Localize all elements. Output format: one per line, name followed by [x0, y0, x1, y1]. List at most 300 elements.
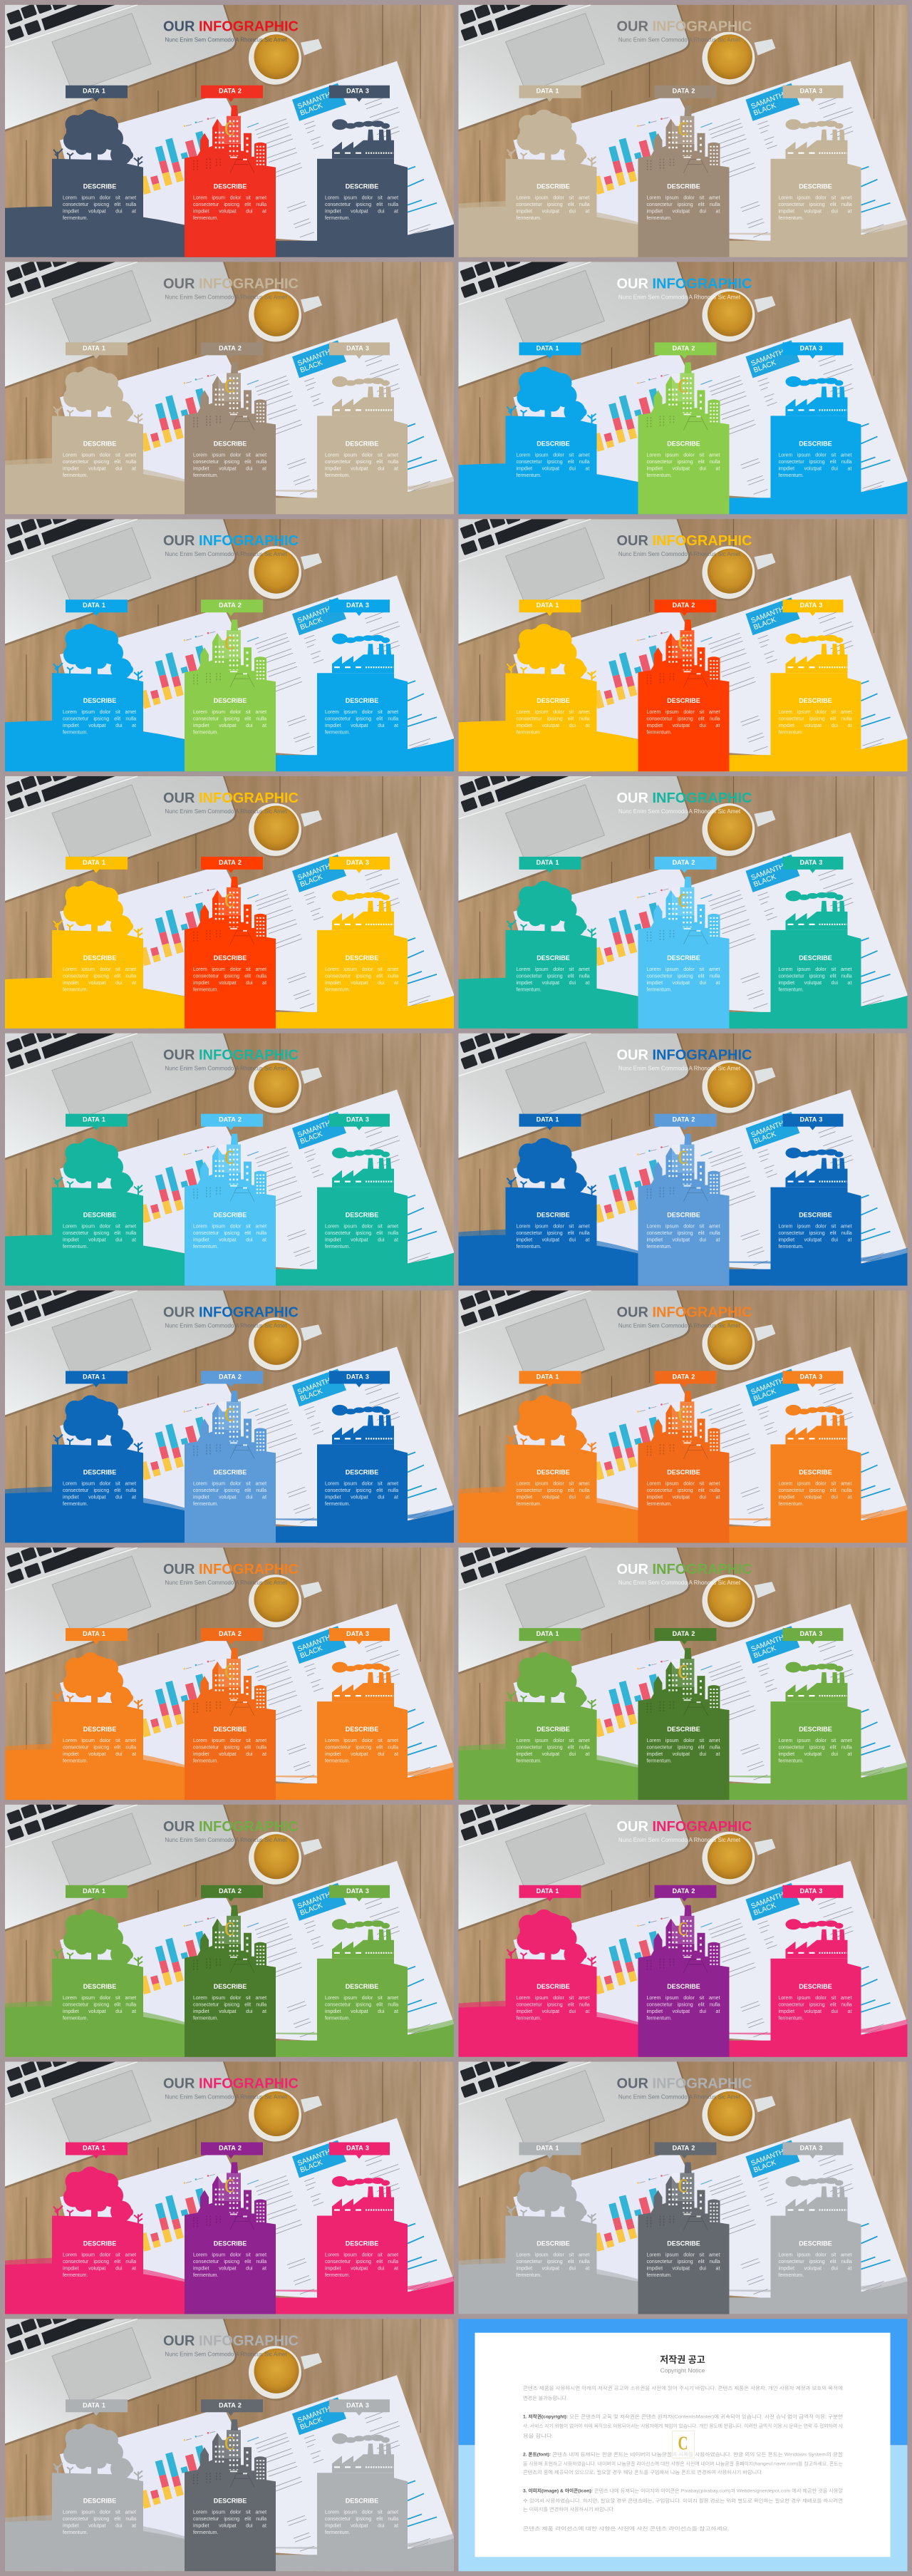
resume name tag: SAMANTHA [296, 1375, 336, 1396]
panel: data 3 factory: DATA 3 [800, 1887, 822, 1895]
panel: data 2 city: Lorem ipsum dolor sit amet [647, 2252, 720, 2258]
watermark: C [678, 890, 688, 911]
panel: data 1 tree: consectetur ipsicng elit nulla [516, 2002, 590, 2007]
watermark [673, 117, 694, 144]
panel: data 1 tree: consectetur ipsicng elit nulla [63, 1746, 136, 1751]
panel: data 1 tree: consectetur ipsicng elit nulla [63, 202, 136, 207]
light blue background bottom [459, 2445, 908, 2571]
panel: data 2 city: DATA 2 [673, 1887, 695, 1895]
resume name tag: BLACK [299, 2158, 324, 2175]
photo background [459, 2052, 908, 2314]
title: OUR INFOGRAPHIC [617, 533, 752, 549]
panel: data 1 tree: DATA 1 [537, 88, 559, 95]
slide 15: green [5, 1795, 454, 2057]
title: OUR INFOGRAPHIC [617, 1304, 752, 1320]
photo background [459, 252, 908, 514]
panel: data 3 factory [771, 86, 861, 257]
panel: data 2 city [638, 1114, 730, 1286]
photo background [5, 510, 454, 771]
slide 3: tan [5, 252, 454, 514]
notice body text: 콘텐츠 내에 등재되는 이미지와 아이콘은 Pixabay(pixabay.com)과 Webdesignerdepot.com 에서 제공한 것을 사용할 [594, 2487, 843, 2493]
slide 1: navy and red [5, 0, 454, 257]
wave band [5, 2515, 454, 2571]
title: OUR INFOGRAPHIC [163, 1819, 299, 1835]
panel: data 3 factory: fermentum. [325, 731, 350, 736]
photo background [5, 252, 454, 514]
panel: data 2 city: Lorem ipsum dolor sit amet [647, 967, 720, 972]
title: OUR INFOGRAPHIC [163, 1304, 299, 1320]
panel: data 3 factory: fermentum. [325, 1502, 350, 1507]
panel: data 2 city [638, 86, 730, 257]
panel: data 2 city: DATA 2 [219, 1116, 242, 1123]
panel: data 1 tree: impdiet volutpat dui at [63, 1752, 136, 1757]
panel: data 3 factory: fermentum. [778, 2273, 804, 2278]
photo background [459, 510, 908, 771]
panel: data 3 factory: DATA 3 [800, 1116, 822, 1123]
notice body text: 콘텐츠 내에 등재되는 한글 폰트는 네이버의 나눔글꼴과 서체를 사용하였습니다. 한글 외의 모든 폰트는 Windows System의 글꼴 [552, 2451, 843, 2457]
watermark [673, 2174, 694, 2201]
panel: data 3 factory: Lorem ipsum dolor sit amet [325, 1481, 398, 1486]
wave band [459, 458, 908, 514]
watermark: C [224, 1661, 234, 1682]
panel: data 1 tree: consectetur ipsicng elit nulla [63, 2517, 136, 2522]
panel: data 3 factory: DESCRIBE [799, 183, 832, 190]
panel: data 3 factory: fermentum. [778, 987, 804, 992]
panel: data 1 tree: consectetur ipsicng elit nulla [516, 974, 590, 979]
panel: data 1 tree: Lorem ipsum dolor sit amet [63, 1225, 136, 1230]
panel: data 2 city: DESCRIBE [214, 1983, 247, 1990]
panel: data 2 city: Lorem ipsum dolor sit amet [193, 1996, 266, 2001]
panel: data 3 factory: fermentum. [325, 2273, 350, 2278]
panel: data 1 tree: DESCRIBE [83, 2240, 116, 2247]
watermark [219, 117, 241, 144]
notice body text: 콘텐츠의 품에 제공되어 있으므로, 필요할 경우 해당 폰트를 구입해서 나눔 폰트로 변경하여 사용하시기 바랍니다. [523, 2468, 763, 2475]
wave band [5, 2001, 454, 2057]
panel: data 2 city: DATA 2 [219, 602, 242, 609]
panel: data 1 tree: DATA 1 [537, 344, 559, 351]
panel: data 1 tree [506, 342, 597, 514]
panel: data 3 factory: DESCRIBE [799, 2240, 832, 2247]
panel: data 2 city: DATA 2 [219, 1887, 242, 1895]
panel: data 2 city: impdiet volutpat dui at [647, 1495, 720, 1500]
panel: data 2 city: DATA 2 [673, 602, 695, 609]
subtitle: Nunc Enim Sem Commodo A Rhoncus Sic Amet [165, 294, 287, 300]
panel: data 3 factory: DESCRIBE [346, 1726, 378, 1733]
panel: data 2 city: Lorem ipsum dolor sit amet [193, 1481, 266, 1486]
panel: data 2 city [185, 86, 276, 257]
slide 12: orange [459, 1281, 908, 1542]
watermark [673, 2431, 694, 2458]
wave band [5, 458, 454, 514]
panel: data 3 factory: Lorem ipsum dolor sit amet [778, 1738, 852, 1743]
panel: data 2 city: Lorem ipsum dolor sit amet [193, 710, 266, 715]
notice body text: 콘텐츠 제품 라이선스에 대한 사항은 사전에 사전 콘텐츠 라이선스를 참고하세요. [523, 2525, 730, 2531]
resume name tag: BLACK [299, 616, 324, 632]
panel: data 1 tree: fermentum. [63, 1245, 88, 1250]
title: OUR INFOGRAPHIC [617, 790, 752, 806]
resume name tag: SAMANTHA [750, 346, 789, 368]
panel: data 3 factory: consectetur ipsicng elit nulla [325, 1746, 398, 1751]
panel: data 1 tree: consectetur ipsicng elit nulla [63, 2002, 136, 2007]
resume name tag: BLACK [299, 102, 324, 118]
panel: data 1 tree: Lorem ipsum dolor sit amet [516, 710, 590, 715]
panel: data 2 city: fermentum. [193, 987, 218, 992]
panel: data 1 tree: impdiet volutpat dui at [63, 2523, 136, 2528]
panel: data 2 city: fermentum. [193, 2273, 218, 2278]
resume name tag: BLACK [299, 2416, 324, 2431]
panel: data 2 city: DATA 2 [219, 344, 242, 351]
panel: data 2 city: Lorem ipsum dolor sit amet [647, 1738, 720, 1743]
panel: data 3 factory: Lorem ipsum dolor sit amet [325, 1996, 398, 2001]
panel: data 2 city: Lorem ipsum dolor sit amet [193, 1225, 266, 1230]
panel: data 3 factory: consectetur ipsicng elit nulla [325, 2002, 398, 2007]
panel: data 3 factory: DATA 3 [346, 2401, 369, 2408]
title: OUR INFOGRAPHIC [163, 2333, 299, 2349]
panel: data 2 city: Lorem ipsum dolor sit amet [193, 453, 266, 458]
photo background [5, 2052, 454, 2314]
panel: data 3 factory: Lorem ipsum dolor sit amet [325, 967, 398, 972]
panel: data 2 city: DATA 2 [673, 859, 695, 866]
resume name tag: SAMANTHA [750, 861, 789, 882]
resume name tag: SAMANTHA [296, 346, 336, 368]
photo background [5, 766, 454, 1029]
panel: data 3 factory: fermentum. [778, 1502, 804, 1507]
panel: data 2 city: DATA 2 [673, 1373, 695, 1380]
panel: data 3 factory [771, 1114, 861, 1286]
panel: data 2 city [185, 2143, 276, 2314]
panel: data 1 tree: DATA 1 [83, 1887, 105, 1895]
panel: data 2 city: Lorem ipsum dolor sit amet [647, 1225, 720, 1230]
panel: data 2 city: Lorem ipsum dolor sit amet [193, 196, 266, 201]
watermark [673, 1917, 694, 1944]
panel: data 2 city: DATA 2 [219, 2144, 242, 2151]
wave band [459, 1743, 908, 1800]
subtitle: Nunc Enim Sem Commodo A Rhoncus Sic Amet [165, 2351, 287, 2357]
resume name tag: SAMANTHA [750, 1118, 789, 1139]
panel: data 3 factory: consectetur ipsicng elit nulla [778, 974, 852, 979]
panel: data 3 factory [317, 342, 408, 514]
panel: data 2 city: DESCRIBE [667, 1468, 700, 1475]
panel: data 1 tree: Lorem ipsum dolor sit amet [516, 1481, 590, 1486]
resume name tag: SAMANTHA [296, 89, 336, 111]
subtitle: Nunc Enim Sem Commodo A Rhoncus Sic Amet [165, 808, 287, 815]
watermark: C [678, 1403, 688, 1425]
photo background [459, 0, 908, 257]
notice heading: 저작권 공고 [660, 2354, 705, 2365]
slide 6: yellow and red-orange [459, 510, 908, 771]
panel: data 2 city: impdiet volutpat dui at [193, 1752, 266, 1757]
title: OUR INFOGRAPHIC [163, 19, 299, 35]
panel: data 3 factory: impdiet volutpat dui at [325, 981, 398, 986]
white notice card [475, 2333, 891, 2557]
panel: data 1 tree: Lorem ipsum dolor sit amet [63, 1996, 136, 2001]
panel: data 3 factory [317, 857, 408, 1029]
panel: data 2 city: consectetur ipsicng elit nulla [647, 1488, 720, 1493]
panel: data 3 factory: Lorem ipsum dolor sit amet [778, 453, 852, 458]
panel: data 2 city: DESCRIBE [214, 183, 247, 190]
panel: data 2 city: consectetur ipsicng elit nulla [193, 1746, 266, 1751]
panel: data 3 factory: consectetur ipsicng elit nulla [325, 974, 398, 979]
panel: data 1 tree: impdiet volutpat dui at [63, 2267, 136, 2271]
panel: data 3 factory: impdiet volutpat dui at [325, 1238, 398, 1243]
panel: data 1 tree: consectetur ipsicng elit nulla [63, 974, 136, 979]
panel: data 3 factory: impdiet volutpat dui at [778, 210, 851, 215]
panel: data 3 factory: Lorem ipsum dolor sit amet [325, 453, 398, 458]
panel: data 1 tree: impdiet volutpat dui at [63, 1238, 136, 1243]
resume name tag: SAMANTHA [296, 604, 336, 625]
panel: data 1 tree [506, 857, 597, 1029]
panel: data 1 tree: DESCRIBE [83, 183, 116, 190]
panel: data 1 tree: DATA 1 [83, 344, 105, 351]
watermark [673, 1659, 694, 1686]
panel: data 2 city: Lorem ipsum dolor sit amet [193, 2252, 266, 2258]
panel: data 2 city [185, 1371, 276, 1542]
slide 4: sky blue and green [459, 252, 908, 514]
panel: data 1 tree: DESCRIBE [537, 440, 570, 447]
panel: data 1 tree: Lorem ipsum dolor sit amet [516, 453, 590, 458]
wave band [5, 1486, 454, 1542]
panel: data 2 city: DESCRIBE [667, 1212, 700, 1219]
panel: data 2 city [185, 2399, 276, 2571]
wave band [459, 715, 908, 771]
panel: data 1 tree: consectetur ipsicng elit nulla [63, 460, 136, 465]
slide 17: pink and purple [5, 2052, 454, 2314]
subtitle: Nunc Enim Sem Commodo A Rhoncus Sic Amet [165, 1580, 287, 1586]
resume name tag: BLACK [752, 102, 777, 118]
resume name tag: BLACK [752, 359, 777, 375]
panel: data 1 tree: fermentum. [516, 1502, 542, 1507]
subtitle: Nunc Enim Sem Commodo A Rhoncus Sic Amet [618, 1066, 741, 1072]
blue background top [459, 2319, 908, 2445]
photo background [459, 1538, 908, 1800]
panel: data 2 city: consectetur ipsicng elit nulla [193, 2260, 266, 2265]
panel: data 2 city: DESCRIBE [214, 1468, 247, 1475]
panel: data 3 factory: DATA 3 [346, 344, 369, 351]
resume name tag: BLACK [299, 1387, 324, 1403]
slide 2: tan [459, 0, 908, 257]
panel: data 1 tree [52, 1885, 143, 2057]
panel: data 3 factory: Lorem ipsum dolor sit amet [778, 196, 852, 201]
panel: data 3 factory: DESCRIBE [799, 1212, 832, 1219]
panel: data 1 tree: impdiet volutpat dui at [516, 2009, 589, 2014]
panel: data 3 factory: DATA 3 [800, 859, 822, 866]
resume name tag: SAMANTHA [750, 1375, 789, 1396]
panel: data 1 tree: impdiet volutpat dui at [516, 981, 589, 986]
panel: data 2 city [638, 2143, 730, 2314]
panel: data 2 city: consectetur ipsicng elit nulla [193, 1488, 266, 1493]
panel: data 3 factory: consectetur ipsicng elit nulla [325, 460, 398, 465]
panel: data 1 tree: DESCRIBE [537, 697, 570, 704]
panel: data 3 factory: Lorem ipsum dolor sit amet [778, 2252, 852, 2258]
panel: data 1 tree: DATA 1 [83, 859, 105, 866]
panel: data 2 city: Lorem ipsum dolor sit amet [647, 1481, 720, 1486]
wave band [459, 2258, 908, 2314]
slide 18: gray [459, 2052, 908, 2314]
resume name tag: BLACK [752, 1644, 777, 1660]
panel: data 1 tree: DESCRIBE [83, 1212, 116, 1219]
slide 7: yellow and red-orange [5, 766, 454, 1029]
notice body text: 사, 서비스 사기 위험이 없어야 하며 목적으로 이용되어서는 사용자에게 책임이 있습니다. 개인 용도에 한합니다. 이러한 금액적 이용 시 문의는 연락 후 협의하여 사 [523, 2422, 843, 2428]
panel: data 1 tree: DESCRIBE [537, 954, 570, 962]
panel: data 3 factory: DESCRIBE [799, 440, 832, 447]
panel: data 3 factory: impdiet volutpat dui at [325, 1495, 398, 1500]
panel: data 1 tree: fermentum. [63, 2530, 88, 2535]
wave band [459, 972, 908, 1029]
panel: data 1 tree [52, 857, 143, 1029]
panel: data 2 city: DESCRIBE [214, 1726, 247, 1733]
resume name tag: BLACK [752, 873, 777, 889]
resume name tag: SAMANTHA [750, 604, 789, 625]
watermark: C [224, 632, 234, 654]
notice body text: 모든 콘텐츠의 교육 및 저작권은 콘텐츠 원저자(ContentsMaster)에 귀속되어 있습니다. 사전 승낙 없이 금액적 이용, 구분한 [569, 2413, 843, 2419]
panel: data 1 tree [506, 1371, 597, 1542]
panel: data 1 tree: DATA 1 [83, 2144, 105, 2151]
panel: data 3 factory: DESCRIBE [346, 1468, 378, 1475]
panel: data 3 factory: DATA 3 [800, 2144, 822, 2151]
panel: data 3 factory: DATA 3 [346, 1373, 369, 1380]
panel: data 3 factory: Lorem ipsum dolor sit amet [325, 2510, 398, 2515]
notice body text: 을 사용해 표현하고 사용하였습니다. 네이버의 나눔글꼴 라이선스에 대한 사항은 사전에 네이버 나눔글꼴 홈페이지(hangeul.naver.com)를 참고하세요. 폰트는 [523, 2460, 843, 2466]
panel: data 1 tree [506, 1114, 597, 1286]
panel: data 2 city: DATA 2 [673, 88, 695, 95]
panel: data 2 city: DATA 2 [673, 2144, 695, 2151]
photo background [5, 2309, 454, 2571]
panel: data 3 factory: consectetur ipsicng elit nulla [778, 460, 852, 465]
panel: data 1 tree: impdiet volutpat dui at [63, 723, 136, 728]
subtitle: Nunc Enim Sem Commodo A Rhoncus Sic Amet [618, 551, 741, 557]
panel: data 1 tree [52, 2143, 143, 2314]
title: OUR INFOGRAPHIC [163, 533, 299, 549]
panel: data 3 factory [771, 1371, 861, 1542]
notice body text: 는 이미지를 변경하여 사용하시기 바랍니다. [523, 2505, 615, 2512]
panel: data 3 factory: impdiet volutpat dui at [325, 466, 398, 471]
panel: data 1 tree: Lorem ipsum dolor sit amet [63, 1738, 136, 1743]
panel: data 3 factory [771, 342, 861, 514]
panel: data 2 city [638, 599, 730, 771]
watermark: C [224, 890, 234, 911]
panel: data 3 factory: impdiet volutpat dui at [778, 2267, 851, 2271]
panel: data 1 tree: Lorem ipsum dolor sit amet [63, 196, 136, 201]
panel: data 1 tree: consectetur ipsicng elit nulla [63, 717, 136, 722]
panel: data 1 tree [506, 599, 597, 771]
panel: data 3 factory: consectetur ipsicng elit nulla [778, 2260, 852, 2265]
panel: data 1 tree: consectetur ipsicng elit nulla [63, 2260, 136, 2265]
panel: data 1 tree: DATA 1 [537, 1373, 559, 1380]
panel: data 1 tree: fermentum. [516, 473, 542, 478]
panel: data 3 factory: Lorem ipsum dolor sit amet [325, 196, 398, 201]
title: OUR INFOGRAPHIC [617, 1819, 752, 1835]
subtitle: Nunc Enim Sem Commodo A Rhoncus Sic Amet [165, 1322, 287, 1329]
panel: data 3 factory: DESCRIBE [799, 1468, 832, 1475]
panel: data 2 city: fermentum. [647, 1502, 672, 1507]
subtitle: Nunc Enim Sem Commodo A Rhoncus Sic Amet [165, 1837, 287, 1843]
resume name tag: SAMANTHA [296, 2404, 336, 2425]
panel: data 3 factory: DESCRIBE [799, 697, 832, 704]
panel: data 2 city: consectetur ipsicng elit nulla [647, 2002, 720, 2007]
photo background [5, 1281, 454, 1542]
resume name tag: SAMANTHA [296, 2146, 336, 2168]
panel: data 2 city [638, 1371, 730, 1542]
panel: data 3 factory: fermentum. [325, 2016, 350, 2021]
panel: data 1 tree [52, 86, 143, 257]
watermark: C [678, 1147, 688, 1168]
panel: data 1 tree [506, 1885, 597, 2057]
panel: data 1 tree: Lorem ipsum dolor sit amet [63, 710, 136, 715]
panel: data 1 tree: consectetur ipsicng elit nulla [516, 1746, 590, 1751]
watermark [673, 631, 694, 658]
resume name tag: SAMANTHA [750, 1632, 789, 1654]
panel: data 3 factory: DESCRIBE [346, 2497, 378, 2504]
panel: data 1 tree: fermentum. [516, 2016, 542, 2021]
panel: data 3 factory: DATA 3 [346, 1116, 369, 1123]
wave band [5, 1230, 454, 1286]
notice body text: 수 있어서 사용하였습니다. 하지만, 필요할 경우 콘텐츠에는, 구입합니다. 이미지 활용 경로는 위와 별도로 확인하는 필요한 경우 재배포를 하시려면 [523, 2497, 843, 2503]
panel: data 1 tree: Lorem ipsum dolor sit amet [516, 196, 590, 201]
panel: data 2 city: consectetur ipsicng elit nulla [647, 1746, 720, 1751]
notice body text: 1. 저작권(copyright): [523, 2413, 568, 2419]
wave band [459, 2001, 908, 2057]
watermark: C [224, 375, 234, 396]
panel: data 3 factory [317, 2399, 408, 2571]
resume name tag: BLACK [299, 1130, 324, 1146]
panel: data 3 factory: impdiet volutpat dui at [325, 2523, 398, 2528]
resume name tag: BLACK [299, 359, 324, 375]
panel: data 3 factory [771, 2143, 861, 2314]
watermark [219, 1659, 241, 1686]
panel: data 3 factory: DESCRIBE [346, 440, 378, 447]
resume name tag: BLACK [752, 616, 777, 632]
panel: data 2 city: fermentum. [193, 731, 218, 736]
panel: data 1 tree: consectetur ipsicng elit nulla [516, 460, 590, 465]
panel: data 1 tree: impdiet volutpat dui at [63, 981, 136, 986]
panel: data 3 factory [317, 1114, 408, 1286]
title: OUR INFOGRAPHIC [163, 276, 299, 292]
panel: data 3 factory: impdiet volutpat dui at [778, 466, 851, 471]
slide 11: dark blue [5, 1281, 454, 1542]
panel: data 2 city: fermentum. [193, 1245, 218, 1250]
panel: data 2 city: impdiet volutpat dui at [193, 2267, 266, 2271]
panel: data 3 factory: fermentum. [778, 2016, 804, 2021]
panel: data 3 factory: Lorem ipsum dolor sit amet [778, 967, 852, 972]
subtitle: Nunc Enim Sem Commodo A Rhoncus Sic Amet [165, 37, 287, 43]
watermark: C [678, 2175, 688, 2197]
resume name tag: BLACK [299, 1644, 324, 1660]
panel: data 3 factory: fermentum. [325, 216, 350, 221]
panel: data 2 city: fermentum. [647, 2016, 672, 2021]
watermark: C [224, 1147, 234, 1168]
panel: data 2 city: impdiet volutpat dui at [647, 2009, 720, 2014]
panel: data 2 city [185, 857, 276, 1029]
resume name tag: BLACK [299, 1902, 324, 1917]
wave band [459, 1486, 908, 1542]
resume name tag: SAMANTHA [296, 1632, 336, 1654]
panel: data 1 tree: Lorem ipsum dolor sit amet [63, 1481, 136, 1486]
watermark [219, 2431, 241, 2458]
title: OUR INFOGRAPHIC [163, 1048, 299, 1063]
panel: data 1 tree: DESCRIBE [83, 440, 116, 447]
panel: data 1 tree: Lorem ipsum dolor sit amet [516, 2252, 590, 2258]
panel: data 2 city: DESCRIBE [667, 1983, 700, 1990]
panel: data 3 factory: fermentum. [778, 731, 804, 736]
panel: data 2 city: consectetur ipsicng elit nulla [647, 2260, 720, 2265]
panel: data 2 city: impdiet volutpat dui at [647, 1238, 720, 1243]
panel: data 3 factory: impdiet volutpat dui at [778, 723, 851, 728]
panel: data 2 city: fermentum. [193, 216, 218, 221]
panel: data 2 city: Lorem ipsum dolor sit amet [193, 1738, 266, 1743]
panel: data 1 tree: fermentum. [63, 1502, 88, 1507]
panel: data 2 city: Lorem ipsum dolor sit amet [193, 2510, 266, 2515]
watermark: C [224, 2175, 234, 2197]
